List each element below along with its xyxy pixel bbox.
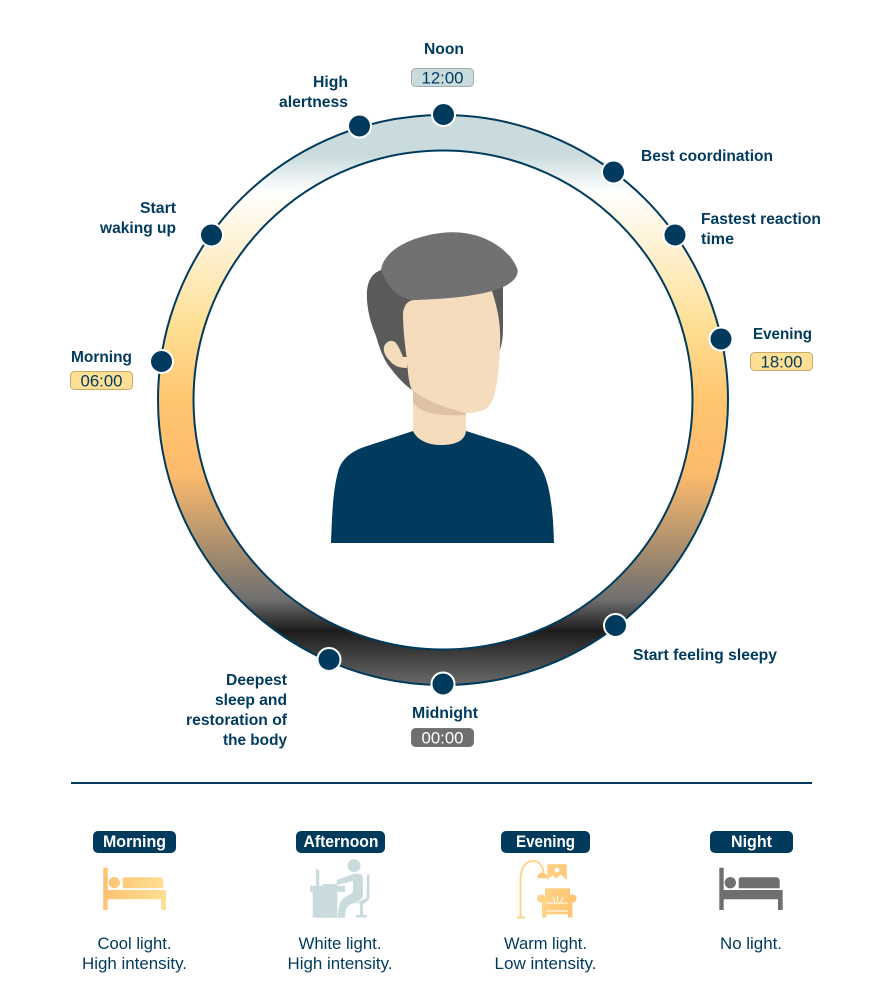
- label: best coordination: Best coordination: [641, 148, 773, 165]
- ear: [384, 341, 408, 368]
- divider: [71, 782, 812, 784]
- legend: afternoon: Afternoon: [304, 832, 378, 851]
- label: midnight: 00:00: [422, 728, 464, 748]
- label: noon: 12:00: [422, 68, 464, 88]
- shirt: [331, 431, 554, 543]
- label: high alertness: alertness: [279, 94, 348, 111]
- legend: afternoon: [288, 831, 392, 973]
- back hair: [367, 270, 503, 390]
- label: evening: 18:00: [760, 352, 802, 372]
- legend: afternoon: High intensity.: [288, 955, 392, 973]
- label: deepest sleep: [186, 672, 288, 749]
- face: [403, 291, 500, 413]
- legend: evening: Low intensity.: [494, 955, 596, 973]
- label: start waking up: waking up: [99, 220, 176, 237]
- label: fastest reaction time: [701, 211, 821, 248]
- legend: night: [710, 831, 793, 953]
- label: midnight: Midnight: [412, 705, 479, 722]
- day cycle ring: [158, 115, 728, 685]
- legend: afternoon: White light.: [298, 935, 382, 953]
- person illustration: [331, 232, 554, 543]
- label: noon: [412, 41, 474, 88]
- legend: morning: [82, 831, 187, 973]
- label: noon: Noon: [424, 41, 464, 58]
- label: morning: [70, 349, 132, 390]
- icon: person at desk: [310, 859, 370, 918]
- icon: bed: [719, 868, 783, 910]
- label: start feeling sleepy: Start feeling sleepy: [633, 647, 777, 664]
- label: high alertness: High: [313, 74, 348, 91]
- legend: morning: Cool light.: [98, 935, 172, 953]
- label: morning: 06:00: [80, 372, 122, 390]
- label: deepest sleep: sleep and: [215, 692, 287, 709]
- label: fastest reaction time: Fastest reaction: [701, 211, 821, 228]
- legend: night: No light.: [720, 935, 782, 953]
- icon: lamp and armchair: [517, 861, 576, 918]
- legend: evening: Evening: [516, 832, 575, 851]
- icon: bed: [103, 868, 166, 910]
- legend: evening: [494, 831, 596, 973]
- label: deepest sleep: restoration of: [186, 712, 288, 729]
- neck: [413, 385, 466, 445]
- legend: night: Night: [731, 832, 772, 851]
- front hair: [381, 232, 518, 300]
- label: high alertness: [279, 74, 348, 111]
- label: evening: Evening: [753, 326, 812, 343]
- label: morning: Morning: [71, 349, 132, 366]
- label: midnight: [412, 705, 479, 748]
- neck shadow: [413, 391, 466, 415]
- label: deepest sleep: the body: [223, 732, 287, 749]
- legend: morning: Morning: [103, 832, 166, 851]
- label: start waking up: [99, 200, 177, 237]
- markers on the ring: [150, 103, 732, 696]
- label: start waking up: Start: [140, 200, 177, 217]
- legend: evening: Warm light.: [504, 935, 587, 953]
- label: fastest reaction time: time: [701, 231, 734, 248]
- legend: morning: High intensity.: [82, 955, 187, 973]
- label: evening: [750, 326, 812, 372]
- label: deepest sleep: Deepest: [226, 672, 288, 689]
